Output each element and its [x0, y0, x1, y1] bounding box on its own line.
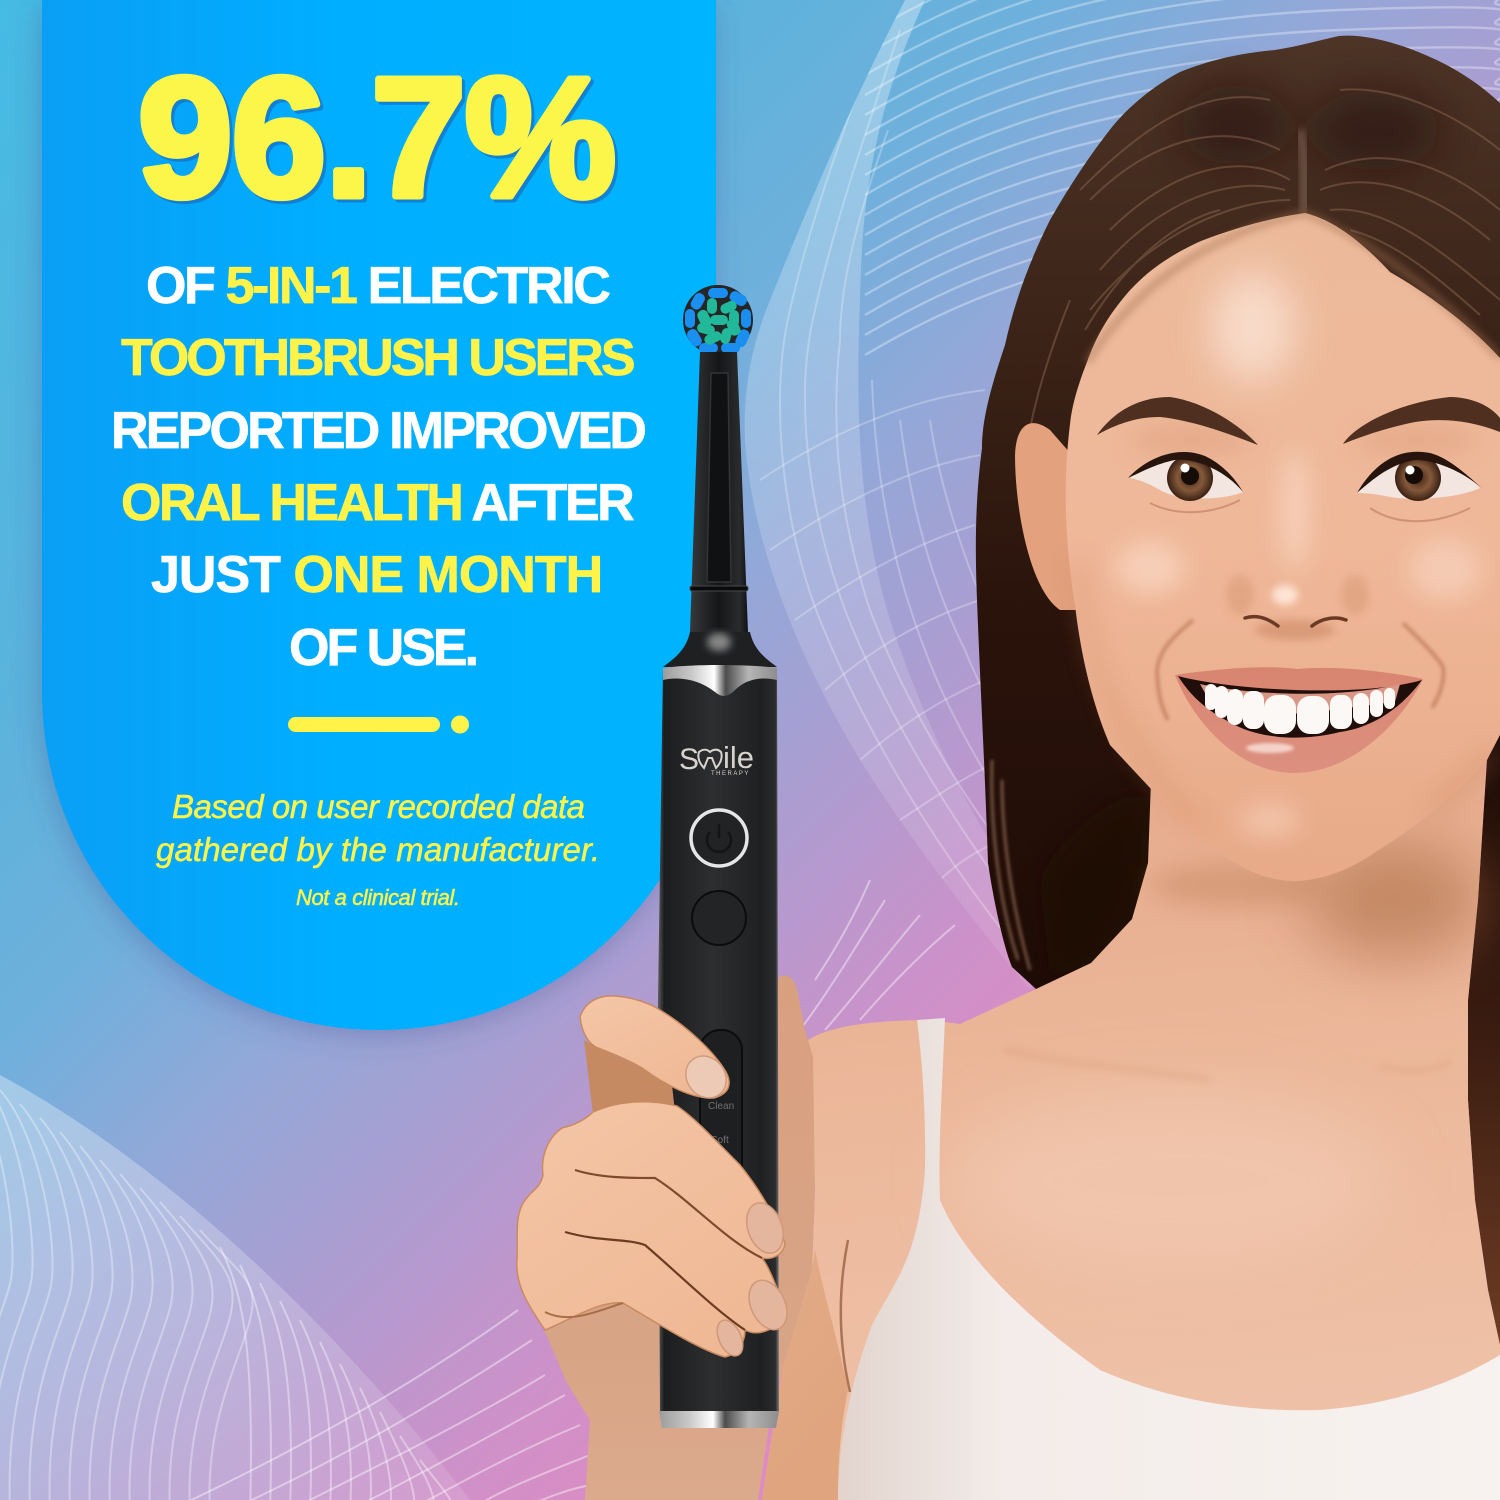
thumb web shadow	[584, 1040, 675, 1115]
forearm	[762, 1250, 848, 1500]
footnote text: gathered by the manufacturer.	[156, 831, 600, 868]
panel shape	[42, 0, 716, 1030]
neck collar	[663, 632, 777, 667]
hairline shadow	[1087, 213, 1500, 362]
mode labels: Soft	[711, 1135, 729, 1146]
handle body	[658, 668, 779, 1412]
woman portrait	[762, 36, 1500, 1500]
main statement text	[111, 257, 645, 677]
background wave: lower left	[0, 880, 955, 1500]
hair parting	[1300, 130, 1305, 212]
logo: S	[679, 743, 699, 776]
main statement text: OF 5-IN-1 ELECTRIC	[146, 257, 610, 315]
panel shadow	[40, 6, 714, 1036]
logo: THERAPY	[711, 771, 750, 777]
main statement text: ORAL HEALTH AFTER	[121, 474, 634, 532]
face edge shading	[1078, 560, 1495, 825]
main statement text: JUST ONE MONTH	[151, 546, 602, 604]
index, middle, ring fingers and knuckles	[517, 1102, 794, 1360]
mode slider	[700, 1030, 742, 1220]
panel: blue statistic panel	[40, 0, 716, 1036]
arm crease	[841, 1240, 850, 1392]
headline number: 96.7%	[138, 43, 615, 233]
collarbones	[1005, 1050, 1450, 1080]
main statement text: REPORTED IMPROVED	[111, 402, 645, 460]
hair strands	[1030, 89, 1500, 430]
brush head	[683, 285, 753, 355]
right eye	[1357, 452, 1482, 521]
cheek and chin highlights	[1116, 450, 1481, 836]
hand fingers	[517, 996, 794, 1360]
footnote text: Based on user recorded data	[172, 788, 585, 825]
collar highlight	[707, 633, 731, 651]
ear	[1015, 423, 1085, 610]
eye socket shading	[1130, 426, 1475, 454]
hair edge highlight strands	[992, 760, 1030, 970]
neck shadow	[1305, 840, 1485, 960]
mouth	[1175, 667, 1423, 773]
shaft groove	[707, 373, 731, 582]
chrome base	[659, 1411, 779, 1428]
thumb	[580, 996, 735, 1106]
second button	[692, 891, 746, 945]
main statement text: OF USE.	[289, 619, 476, 677]
left eyebrow	[1097, 397, 1258, 445]
neck under chin shadow	[1150, 863, 1330, 907]
hair back	[976, 36, 1500, 989]
chest highlight	[950, 1090, 1390, 1270]
main statement text: TOOTHBRUSH USERS	[121, 329, 634, 387]
headline number: 96.7%	[141, 46, 618, 236]
teeth	[1205, 684, 1395, 734]
face	[1066, 213, 1500, 881]
forehead shine	[1211, 272, 1295, 382]
arm, neck and chest	[762, 755, 1500, 1500]
logo: ile	[723, 740, 754, 775]
power button	[691, 810, 747, 866]
logo	[679, 740, 754, 777]
hand palm and wrist behind toothbrush	[540, 976, 815, 1500]
mode labels	[708, 1101, 734, 1146]
chrome collar	[663, 665, 777, 696]
brush shaft	[690, 352, 748, 632]
toothbrush	[658, 285, 779, 1428]
mode labels: Clean	[708, 1101, 734, 1112]
smile lines	[1157, 620, 1443, 720]
hair crown shading	[1180, 85, 1440, 170]
background wave: upper right	[744, 0, 1500, 990]
hair right lower	[1468, 720, 1500, 1345]
footnote text	[156, 788, 600, 910]
right eyebrow	[1343, 397, 1500, 444]
nose	[1226, 575, 1369, 640]
left eye	[1128, 452, 1243, 512]
white tank top	[838, 1018, 1500, 1500]
divider bar and dot	[288, 716, 469, 734]
hair neck shading	[1040, 795, 1150, 980]
shaft ring	[690, 586, 748, 591]
footnote text: Not a clinical trial.	[296, 885, 460, 910]
